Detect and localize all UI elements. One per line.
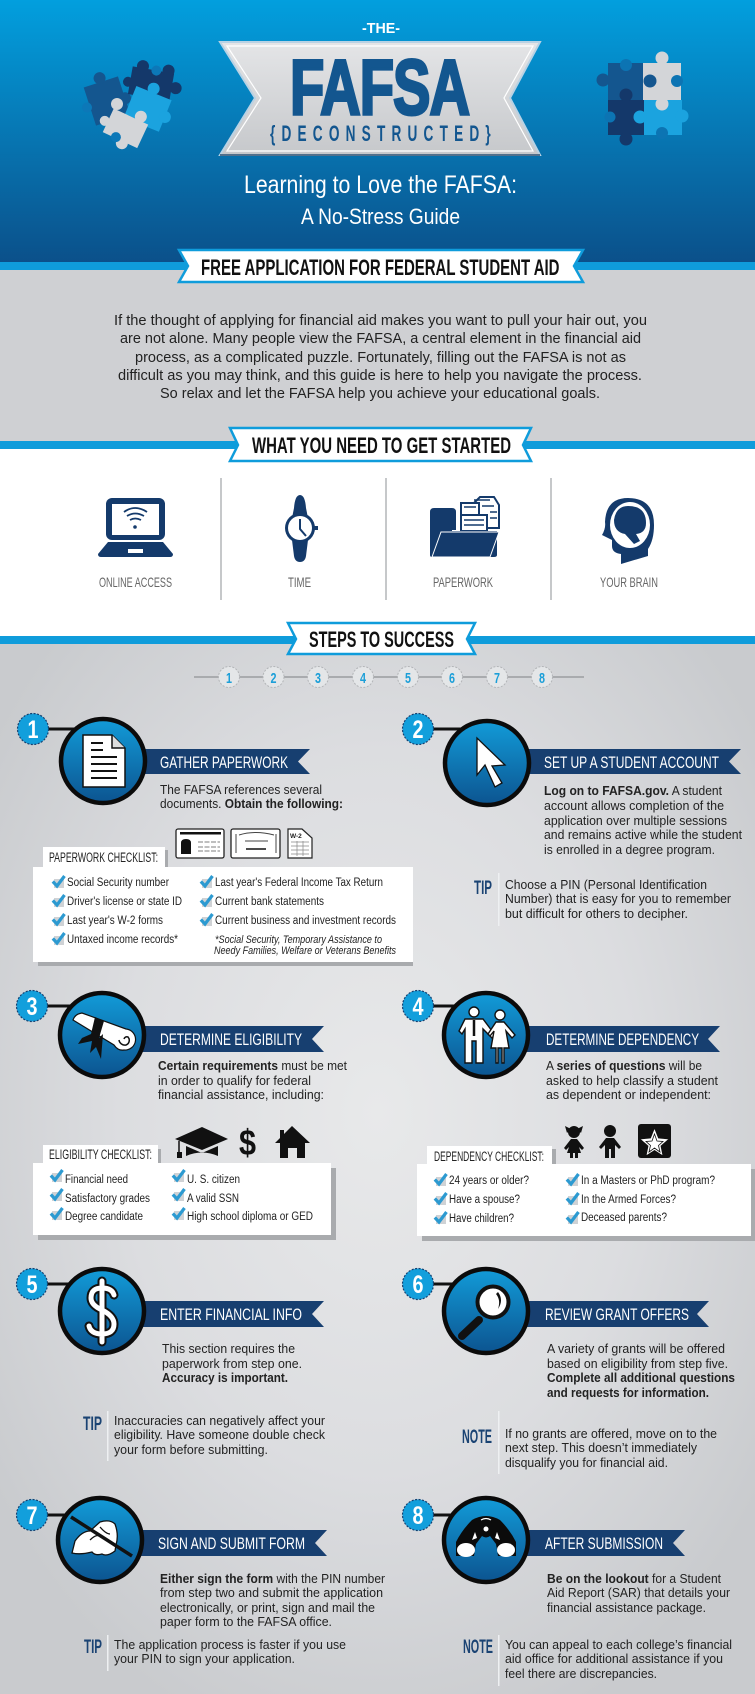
- puzzle: left: [73, 57, 185, 155]
- number badge 7: [16, 1500, 48, 1530]
- tagline: [244, 171, 517, 229]
- text: step 2 intro: and remains active while the student: [544, 827, 742, 842]
- text: step 7 intro: [160, 1571, 386, 1629]
- text: step 5 intro: This section requires the: [162, 1341, 295, 1356]
- text: step 5 intro: Accuracy is important.: [162, 1370, 288, 1385]
- text: step 2 intro: application over multiple sessions: [544, 813, 727, 828]
- text: step 8 intro: [547, 1571, 731, 1615]
- ribbon: steps to success: [288, 623, 475, 654]
- checklist: dependency: In the Armed Forces?: [581, 1194, 676, 1206]
- ribbon: enter financial info: [138, 1301, 324, 1327]
- checklist: paperwork: Untaxed income records*: [67, 934, 178, 946]
- checklist: eligibility: ELIGIBILITY CHECKLIST:: [49, 1147, 152, 1162]
- text: step 4 intro: as dependent or independent:: [546, 1087, 711, 1102]
- text: step 7 intro: Either sign the form with the PIN number: [160, 1571, 386, 1586]
- header background: [0, 0, 755, 263]
- icon: magnifier: [444, 1269, 528, 1353]
- text: step 3 intro: [158, 1058, 347, 1102]
- dividers: [220, 478, 552, 600]
- note: step 8: feel there are discrepancies.: [505, 1666, 657, 1681]
- eyebrow: the: -THE-: [362, 20, 400, 37]
- text: step 8 intro: financial assistance package.: [547, 1600, 706, 1615]
- number badge 5: [16, 1268, 48, 1300]
- panel: step 3: [16, 990, 347, 1240]
- intro paragraph: process, as a complicated puzzle. Fortunately, filling out the FAFSA is not as: [135, 350, 626, 366]
- number badge 1: 1: [28, 716, 39, 744]
- tip: step 2: Choose a PIN (Personal Identification: [505, 877, 707, 892]
- tip: step 5: your form before submitting.: [114, 1442, 268, 1457]
- text: step 4 intro: A series of questions will be: [546, 1058, 702, 1073]
- text: step 6 intro: and requests for information.: [547, 1385, 709, 1400]
- tip: step 2: Number) that is easy for you to remember: [505, 891, 732, 906]
- note: step 6: next step. This doesn’t immediately: [505, 1440, 697, 1455]
- text: step 7 intro: from step two and submit the application: [160, 1585, 383, 1600]
- number badge 3: [16, 990, 48, 1022]
- tip: step 7: your PIN to sign your application.: [114, 1651, 295, 1666]
- text: step 2 intro: [544, 783, 742, 857]
- checklist: paperwork: Current business and investment records: [215, 915, 396, 927]
- icon: head with brain: [602, 498, 654, 564]
- text: step 2 intro: Log on to FAFSA.gov. A student: [544, 783, 722, 798]
- text: step 6 intro: Complete all additional questions: [547, 1370, 735, 1385]
- note: step 8: You can appeal to each college’s financial: [505, 1637, 732, 1652]
- ribbon: what you need: [230, 428, 531, 461]
- tip: step 5: TIP: [83, 1414, 102, 1435]
- requirement: time: TIME: [288, 574, 311, 590]
- requirement: time: [285, 495, 318, 590]
- band: header: [0, 262, 755, 270]
- checklist: paperwork: PAPERWORK CHECKLIST:: [49, 850, 158, 865]
- step navigator: 4: [360, 670, 366, 687]
- checklist: dependency: [417, 1146, 755, 1241]
- text: step 7 intro: paper form to the FAFSA office.: [160, 1614, 332, 1629]
- icon: binoculars: [444, 1498, 528, 1582]
- tip: step 7: [84, 1635, 346, 1671]
- checklist: dependency: Have children?: [449, 1213, 514, 1225]
- text: step 2 intro: account allows completion of the: [544, 798, 724, 813]
- checklist: paperwork: Needy Families, Welfare or Veterans Benefits: [214, 945, 396, 957]
- checklist: eligibility: [33, 1145, 336, 1240]
- text: step 3 intro: Certain requirements must be met: [158, 1058, 347, 1073]
- icon: diploma: [60, 993, 144, 1077]
- number badge 8: [402, 1500, 434, 1530]
- note: step 6: If no grants are offered, move on to the: [505, 1426, 717, 1441]
- ribbon: sign and submit: [136, 1530, 327, 1556]
- checklist: dependency: DEPENDENCY CHECKLIST:: [434, 1149, 544, 1164]
- checklist: paperwork: Social Security number: [67, 877, 169, 889]
- requirement: your brain: [600, 498, 658, 590]
- step navigator: 6: [449, 670, 455, 687]
- text: step 8 intro: Aid Report (SAR) that details your: [547, 1585, 731, 1600]
- icons: id, check, w-2: [176, 829, 312, 858]
- panel: step 8: [402, 1498, 732, 1686]
- note: step 6: disqualify you for financial aid.: [505, 1455, 668, 1470]
- tip: step 7: TIP: [84, 1637, 102, 1658]
- note: step 8: aid office for additional assistance if you: [505, 1651, 723, 1666]
- icon: laptop: [98, 498, 173, 557]
- ribbon: after submission: [520, 1530, 685, 1556]
- tip: step 5: Inaccuracies can negatively affect your: [114, 1413, 326, 1428]
- step navigator: 5: [405, 670, 411, 687]
- step navigator: 8: [539, 670, 545, 687]
- white requirements background: [0, 441, 755, 636]
- checklist: eligibility: High school diploma or GED: [187, 1211, 313, 1223]
- number badge 5: 5: [26, 1271, 38, 1299]
- number badge 8: 8: [412, 1502, 424, 1530]
- ribbon: sign and submit: SIGN AND SUBMIT FORM: [158, 1534, 305, 1553]
- tip: step 5: [83, 1411, 326, 1461]
- grey intro background: [0, 263, 755, 441]
- requirement: online access: ONLINE ACCESS: [99, 574, 172, 590]
- ribbon: steps to success: STEPS TO SUCCESS: [309, 627, 454, 652]
- ribbon: after submission: AFTER SUBMISSION: [545, 1534, 663, 1553]
- text: step 3 intro: in order to qualify for federal: [158, 1073, 311, 1088]
- checklist: paperwork: Last year's W-2 forms: [67, 915, 163, 927]
- ribbon: enter financial info: ENTER FINANCIAL INFO: [160, 1305, 302, 1324]
- text: step 4 intro: [546, 1058, 718, 1102]
- panel: step 4: [402, 990, 755, 1241]
- intro paragraph: difficult as you may think, and this guide is here to help you navigate the process.: [118, 368, 642, 384]
- intro paragraph: So relax and let the FAFSA help you achieve your educational goals.: [160, 386, 600, 402]
- icon: watch: [285, 495, 318, 562]
- ribbon: free application: [179, 250, 583, 282]
- number badge 2: [402, 714, 434, 744]
- requirement: online access: [98, 498, 173, 590]
- panel: step 7: [16, 1498, 386, 1671]
- checklist: paperwork: *Social Security, Temporary Assistance to: [215, 934, 382, 946]
- step navigator: [194, 666, 584, 688]
- step navigator: 1: [226, 670, 232, 687]
- ribbon: determine dependency: [520, 1026, 720, 1052]
- ribbon: review grant offers: [520, 1301, 709, 1327]
- title banner: [220, 42, 540, 155]
- step navigator: 2: [270, 670, 276, 687]
- number badge 2: 2: [412, 716, 424, 744]
- tip: step 5: eligibility. Have someone double check: [114, 1427, 325, 1442]
- text: step 6 intro: A variety of grants will be offered: [547, 1341, 725, 1356]
- note: step 6: NOTE: [462, 1427, 492, 1448]
- note: step 8: [463, 1635, 732, 1686]
- step navigator: 3: [315, 670, 321, 687]
- text: step 6 intro: based on eligibility from step five.: [547, 1356, 728, 1371]
- icon: dollar: [60, 1269, 144, 1353]
- tip: step 2: TIP: [474, 878, 492, 899]
- number badge 4: 4: [412, 993, 424, 1021]
- text: step 8 intro: Be on the lookout for a Student: [547, 1571, 721, 1586]
- icon: hand with pen: [58, 1498, 142, 1582]
- icon: cursor: [445, 721, 529, 805]
- number badge 6: 6: [412, 1271, 424, 1299]
- text: step 1 intro: [160, 782, 343, 811]
- steps background: [0, 636, 755, 1694]
- note: step 8: NOTE: [463, 1637, 493, 1658]
- icon: document: [61, 719, 145, 803]
- step navigator: 7: [494, 670, 500, 687]
- tagline: A No-Stress Guide: [301, 204, 460, 229]
- number badge 3: 3: [26, 993, 38, 1021]
- tip: step 7: The application process is faster if you use: [114, 1637, 346, 1652]
- icon: couple: [444, 993, 528, 1077]
- subtitle: deconstructed: {DECONSTRUCTED}: [270, 121, 491, 146]
- text: step 5 intro: [162, 1341, 302, 1385]
- tip: step 2: but difficult for others to decipher.: [505, 906, 688, 921]
- icons: girl, boy, star: [564, 1124, 671, 1158]
- intro paragraph: [114, 313, 647, 402]
- checklist: eligibility: U. S. citizen: [187, 1174, 240, 1186]
- tip: step 2: [474, 873, 732, 926]
- requirement: paperwork: PAPERWORK: [433, 574, 493, 590]
- icons: id, check, w-2: W-2: [290, 833, 302, 840]
- text: step 4 intro: asked to help classify a student: [546, 1073, 718, 1088]
- text: step 7 intro: electronically, or print, sign and mail the: [160, 1600, 375, 1615]
- checklist: eligibility: Financial need: [65, 1174, 128, 1186]
- ribbon: gather paperwork: GATHER PAPERWORK: [160, 753, 288, 772]
- ribbon: set up account: [520, 749, 741, 774]
- ribbon: determine eligibility: DETERMINE ELIGIBILITY: [160, 1030, 302, 1049]
- icon: folder with papers: [430, 497, 499, 557]
- text: step 6 intro: [547, 1341, 735, 1400]
- intro paragraph: If the thought of applying for financial aid makes you want to pull your hair out, you: [114, 313, 647, 329]
- checklist: dependency: 24 years or older?: [449, 1175, 529, 1187]
- puzzle: right: [596, 52, 688, 146]
- ribbon: free application: FREE APPLICATION FOR FEDERAL STUDENT AID: [201, 255, 560, 280]
- checklist: paperwork: Current bank statements: [215, 896, 324, 908]
- ribbon: what you need: WHAT YOU NEED TO GET STARTED: [252, 433, 511, 458]
- note: step 6: [462, 1411, 717, 1474]
- checklist: dependency: In a Masters or PhD program?: [581, 1175, 715, 1187]
- icons: cap, dollar, house: [175, 1122, 310, 1163]
- checklist: paperwork: Last year's Federal Income Tax Return: [215, 877, 383, 889]
- number badge 4: [402, 990, 434, 1022]
- panel: step 2: [402, 714, 742, 926]
- icons: cap, dollar, house: $: [239, 1122, 256, 1163]
- intro paragraph: are not alone. Many people view the FAFSA, a central element in the financial aid: [120, 331, 641, 347]
- panel: step 6: [402, 1268, 735, 1474]
- title: FAFSA: FAFSA: [290, 44, 470, 131]
- band: get started: [0, 441, 755, 449]
- tagline: Learning to Love the FAFSA:: [244, 171, 517, 199]
- number badge 1: [18, 714, 48, 744]
- checklist: eligibility: Satisfactory grades: [65, 1193, 150, 1205]
- text: step 1 intro: documents. Obtain the following:: [160, 796, 343, 811]
- text: step 1 intro: The FAFSA references several: [160, 782, 322, 797]
- checklist: paperwork: Driver's license or state ID: [67, 896, 182, 908]
- checklist: eligibility: A valid SSN: [187, 1193, 239, 1205]
- checklist: dependency: Have a spouse?: [449, 1194, 520, 1206]
- ribbon: gather paperwork: [140, 749, 310, 774]
- text: step 2 intro: is enrolled in a degree program.: [544, 842, 715, 857]
- text: step 3 intro: financial assistance, including:: [158, 1087, 324, 1102]
- requirement: your brain: YOUR BRAIN: [600, 574, 658, 590]
- band: steps: [0, 636, 755, 644]
- text: step 5 intro: paperwork from step one.: [162, 1356, 302, 1371]
- checklist: dependency: Deceased parents?: [581, 1212, 667, 1224]
- checklist: paperwork: [33, 847, 413, 966]
- panel: step 1: [18, 714, 413, 966]
- requirement: paperwork: [430, 497, 499, 590]
- ribbon: determine eligibility: [138, 1026, 324, 1052]
- checklist: eligibility: Degree candidate: [65, 1211, 143, 1223]
- number badge 6: [402, 1268, 434, 1300]
- ribbon: review grant offers: REVIEW GRANT OFFERS: [545, 1305, 689, 1324]
- number badge 7: 7: [26, 1502, 38, 1530]
- panel: step 5: [16, 1268, 326, 1461]
